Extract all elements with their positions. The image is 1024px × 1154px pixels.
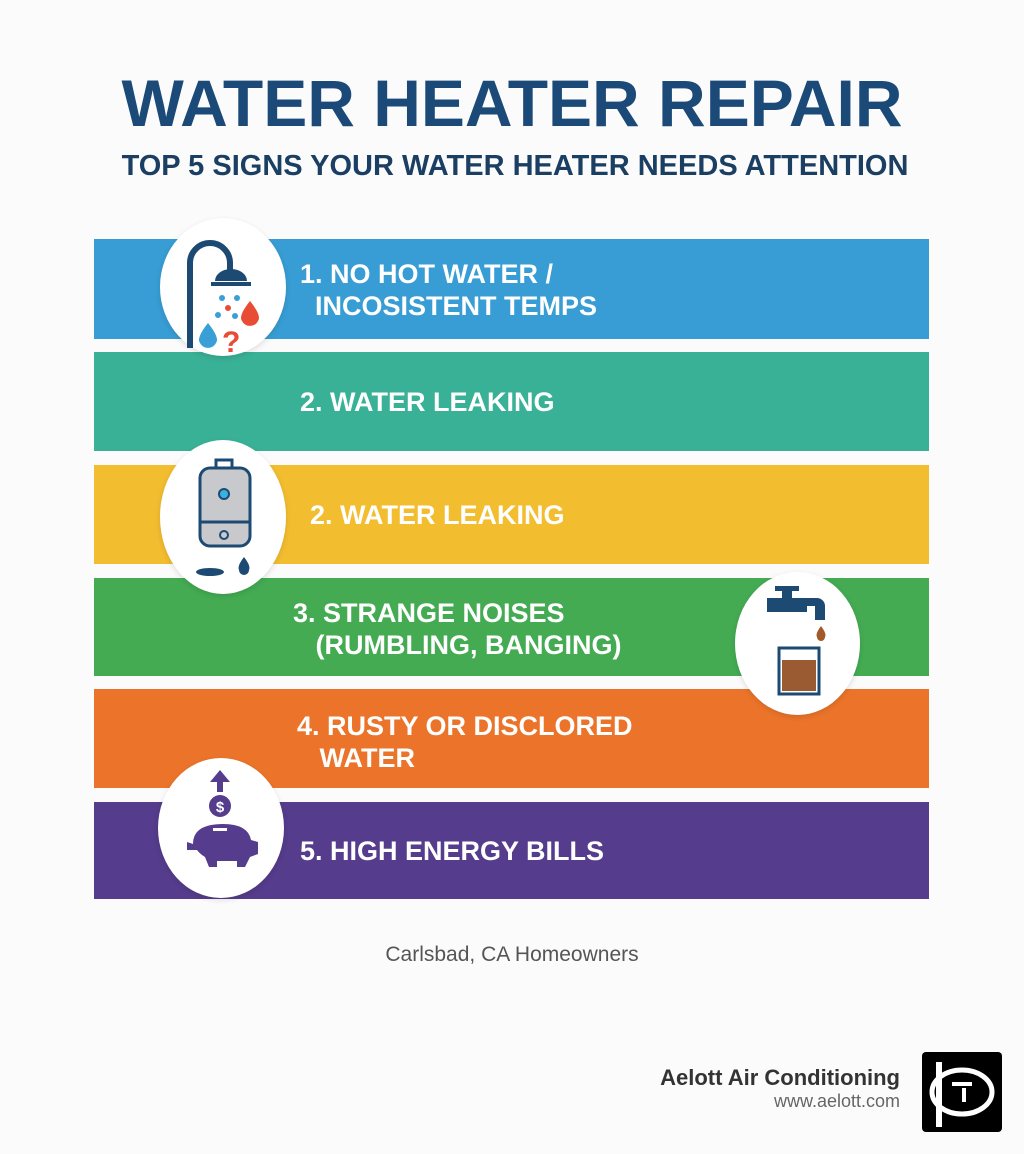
- caption: Carlsbad, CA Homeowners: [385, 943, 639, 966]
- icon: piggy bank: [158, 758, 284, 898]
- text 1: INCOSISTENT TEMPS: [315, 291, 597, 321]
- text 1: 1. NO HOT WATER /: [300, 259, 553, 289]
- text 6: 5. HIGH ENERGY BILLS: [300, 836, 604, 866]
- icon: piggy bank: $: [216, 799, 225, 816]
- band 5: [94, 689, 929, 788]
- icon: water heater: [160, 440, 286, 594]
- band 3: [94, 465, 929, 564]
- logo: [922, 1052, 1002, 1132]
- icon: faucet and glass: [735, 572, 860, 715]
- text 4: [293, 598, 621, 660]
- text 3: 2. WATER LEAKING: [310, 500, 565, 530]
- text 4: 3. STRANGE NOISES: [293, 598, 565, 628]
- band 6: [94, 802, 929, 899]
- text 4: (RUMBLING, BANGING): [316, 630, 621, 660]
- text 5: WATER: [320, 743, 415, 773]
- icon: shower: [160, 218, 286, 356]
- band 4: [94, 578, 929, 676]
- subtitle: TOP 5 SIGNS YOUR WATER HEATER NEEDS ATTENTION: [122, 150, 908, 182]
- text 2: 2. WATER LEAKING: [300, 387, 555, 417]
- text 5: 4. RUSTY OR DISCLORED: [297, 711, 633, 741]
- band 2: [94, 352, 929, 451]
- url: www.aelott.com: [774, 1091, 900, 1111]
- company name: Aelott Air Conditioning: [660, 1065, 900, 1090]
- title: WATER HEATER REPAIR: [121, 66, 902, 140]
- text 5: [297, 711, 633, 773]
- text 1: [300, 259, 597, 321]
- band 1: [94, 239, 929, 339]
